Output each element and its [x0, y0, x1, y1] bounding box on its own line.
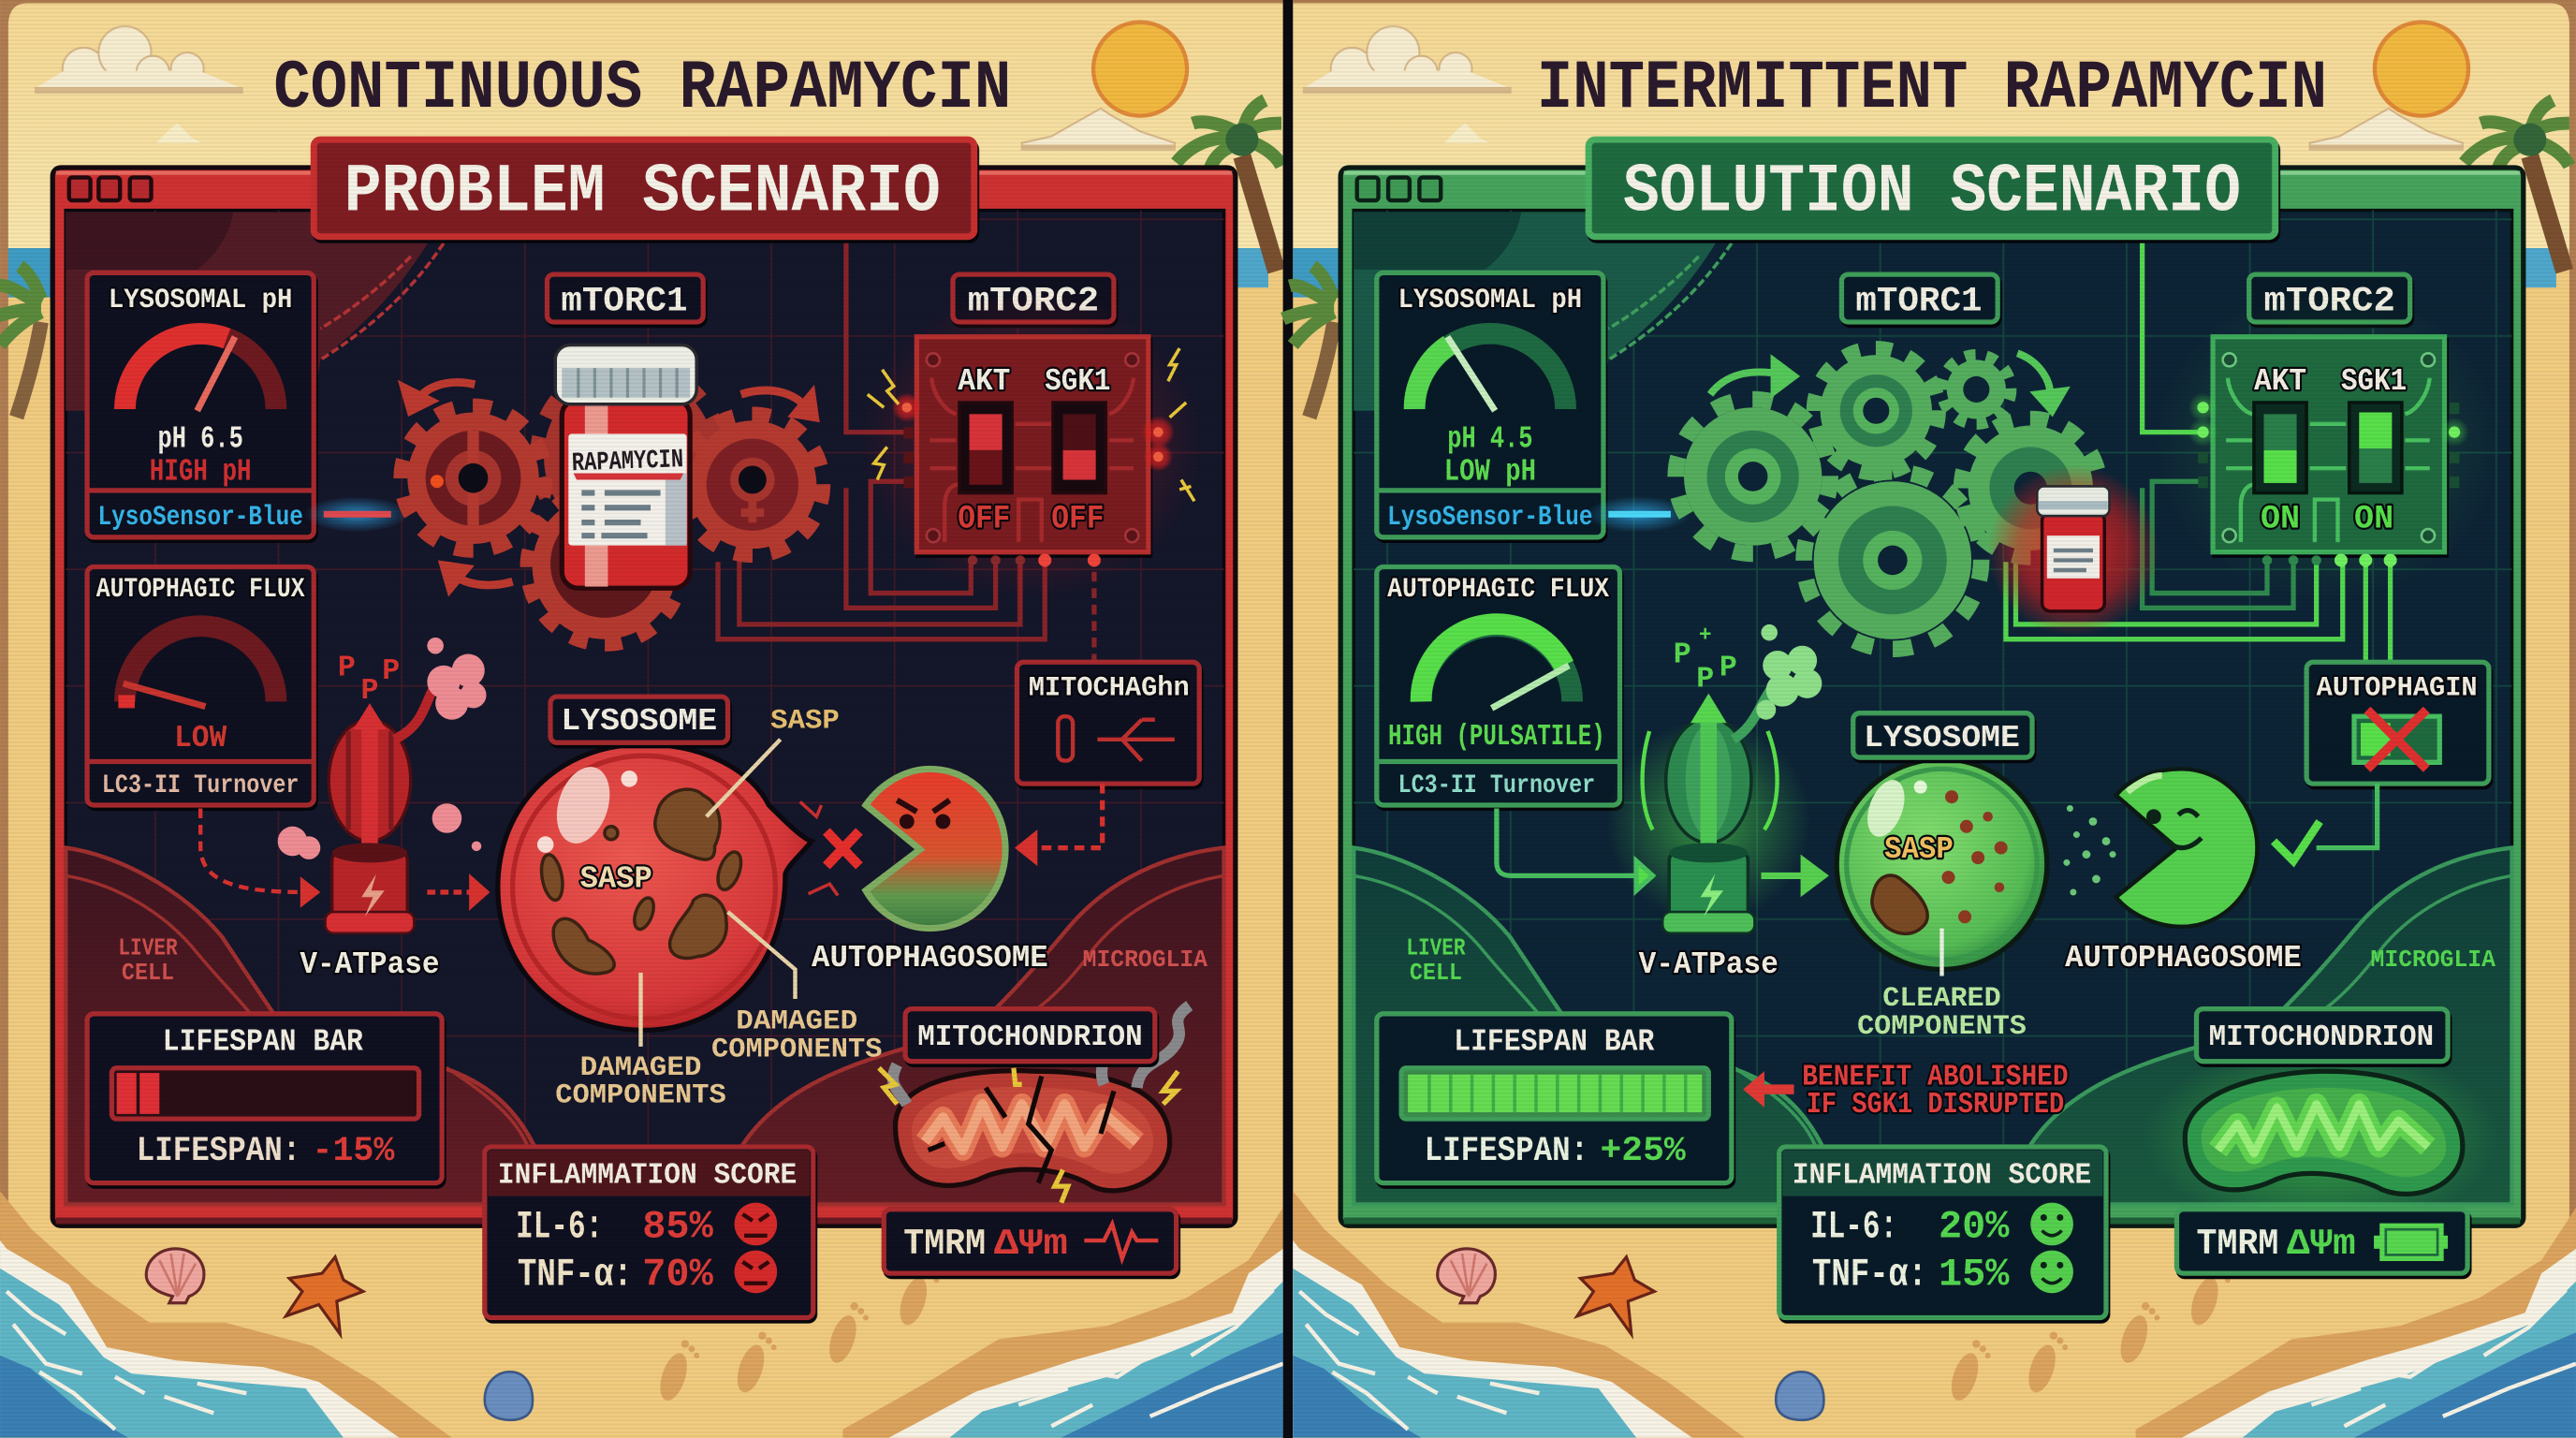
- box: mitochagin: [1017, 662, 1199, 784]
- footprints: [1946, 1265, 2231, 1404]
- icon: flatline pulse: [1084, 1224, 1158, 1258]
- shoreline left: [0, 1191, 452, 1438]
- label: liver cell: CELL: [122, 959, 174, 987]
- background: sea horizon right: [1236, 248, 1268, 287]
- panel: autophagic flux gauge: [87, 566, 314, 805]
- SGK1 toggle: [1053, 403, 1105, 493]
- switch panel: AKT and SGK1 off: [859, 287, 1204, 600]
- arrow: autophagin to autophagosome: [2274, 784, 2378, 861]
- icon: damaged mitochondrion: [879, 1005, 1190, 1203]
- mTORC1 gears: [401, 365, 823, 644]
- bottle label: RAPAMYCIN: [571, 446, 684, 478]
- panel: TMRM readout: TMRM: [2197, 1224, 2278, 1265]
- small cloud: [1022, 109, 1175, 150]
- switch panel: AKT and SGK1 on: ON: [2354, 500, 2393, 537]
- callout: SASP: SASP: [770, 704, 840, 736]
- small gear: [1942, 355, 2011, 424]
- panel: inflammation score: [485, 1147, 813, 1318]
- panel: inflammation score: [1779, 1147, 2106, 1318]
- panel: lysosomal pH gauge: pH 4.5: [1447, 421, 1532, 457]
- panel: inflammation score: 70%: [642, 1252, 713, 1297]
- SGK1 toggle: [2349, 403, 2402, 493]
- window buttons: [1357, 178, 1441, 200]
- switch panel: AKT and SGK1 on: SGK1: [2341, 364, 2407, 400]
- panel: intermittent rapamycin beach scene: [1283, 0, 2576, 1438]
- palm tree left: [0, 266, 41, 418]
- distant cloud: [156, 124, 202, 143]
- probe beam: [304, 496, 409, 533]
- icon: happy face: [2030, 1251, 2073, 1293]
- sand border strip: [1293, 0, 2576, 1249]
- panel: lysosomal pH gauge: LYSOSOMAL pH: [1398, 284, 1582, 315]
- panel: inflammation score: IL-6:: [1810, 1205, 1897, 1250]
- label: microglia: MICROGLIA: [2371, 946, 2496, 974]
- background: sky: [0, 0, 1283, 250]
- phosphate labels: +: [1699, 623, 1712, 647]
- background: sky: [1293, 0, 2576, 250]
- label: liver cell: LIVER: [118, 934, 178, 962]
- microglia region: [739, 848, 1224, 1204]
- probe beam: [1586, 496, 1690, 533]
- panel: lifespan bar: LIFESPAN:: [137, 1132, 300, 1171]
- window buttons: [69, 178, 152, 200]
- sand border strip: [0, 0, 1283, 1249]
- panel: TMRM readout: [884, 1210, 1177, 1273]
- panel: inflammation score: INFLAMMATION SCORE: [498, 1160, 797, 1193]
- icon: V-ATPase pump: [1606, 677, 1810, 933]
- lysosome clean: [1837, 759, 2047, 969]
- phosphate labels: P: [1696, 664, 1714, 697]
- panel: lysosomal pH gauge: LYSOSOMAL pH: [109, 284, 292, 315]
- sparks: [879, 1068, 1178, 1203]
- divider: [1283, 0, 1293, 1438]
- phosphate labels: P: [382, 655, 400, 688]
- panel: autophagic flux gauge: HIGH (PULSATILE): [1388, 721, 1605, 754]
- box: autophagin: [2306, 662, 2489, 784]
- label: mTORC2: mTORC2: [968, 283, 1099, 322]
- panel: TMRM readout: [2176, 1210, 2467, 1273]
- callout: damaged components right: COMPONENTS: [711, 1033, 883, 1064]
- sun: [1093, 22, 1187, 116]
- left gear: [401, 405, 546, 550]
- liver cell region: [1354, 848, 1843, 1204]
- gauge: [118, 626, 276, 707]
- cloud: [35, 26, 243, 94]
- bar: [1401, 1068, 1708, 1119]
- panel: lysosomal pH gauge: LysoSensor-Blue: [1387, 501, 1593, 533]
- rapamycin bottle small glowing: [1988, 465, 2159, 636]
- switch panel: AKT and SGK1 on: [2156, 287, 2500, 600]
- panel: lysosomal pH gauge: HIGH pH: [150, 454, 252, 490]
- smoke: [893, 1005, 1190, 1104]
- panel: lifespan bar: -15%: [313, 1132, 395, 1171]
- icon: pink smoke: [278, 638, 487, 859]
- switch panel: AKT and SGK1 off: OFF: [1051, 500, 1104, 537]
- label: microglia: MICROGLIA: [1083, 946, 1208, 974]
- wires mTORC2: [718, 240, 1094, 662]
- label: liver cell: [118, 934, 178, 987]
- box: autophagin: AUTOPHAGIN: [2317, 671, 2478, 703]
- label: mTORC1: mTORC1: [1855, 283, 1982, 322]
- background: lower sand: [0, 250, 1283, 1438]
- callout: damaged components right: DAMAGED: [736, 1005, 857, 1037]
- rotation arrows: [1710, 353, 2063, 411]
- panel: autophagic flux gauge: LC3-II Turnover: [1398, 771, 1595, 800]
- background: sea horizon right: [2524, 248, 2556, 287]
- palm tree right: [2465, 100, 2569, 271]
- panel: inflammation score: TNF-α:: [518, 1252, 633, 1297]
- shell: [1438, 1249, 1495, 1303]
- panel: autophagic flux gauge: AUTOPHAGIC FLUX: [96, 573, 305, 605]
- callout: benefit abolished: BENEFIT ABOLISHED: [1802, 1061, 2069, 1093]
- bottom gear: [1804, 472, 1982, 649]
- phosphate labels: P: [1720, 652, 1737, 684]
- switch panel: AKT and SGK1 on: ON: [2261, 500, 2300, 537]
- lysosome: [498, 744, 812, 1030]
- panel: lifespan bar: [87, 1014, 442, 1183]
- heading: continuous rapamycin: CONTINUOUS RAPAMYCIN: [273, 51, 1011, 128]
- pebble: [1776, 1372, 1823, 1420]
- shoreline left: [1293, 1191, 1745, 1438]
- callout: damaged components: DAMAGED: [580, 1051, 701, 1083]
- icon: blocked X: [800, 801, 859, 895]
- label: mTORC1: [547, 274, 703, 322]
- bottom gear: [527, 490, 681, 644]
- icon: angry face: [735, 1203, 777, 1245]
- label: lysosome: [1853, 713, 2032, 757]
- icon: full battery: [2374, 1225, 2448, 1258]
- microglia region: [2027, 848, 2511, 1204]
- rapamycin bottle: [555, 345, 696, 588]
- panel: inflammation score: TNF-α:: [1812, 1252, 1927, 1297]
- panel: inflammation score: INFLAMMATION SCORE: [1793, 1160, 2091, 1193]
- phosphate labels: P: [1674, 638, 1691, 671]
- starfish: [285, 1257, 363, 1334]
- panel: lysosomal pH gauge: LOW pH: [1444, 454, 1536, 490]
- icon: check mark: [2274, 822, 2320, 861]
- wires mTORC2: [2006, 240, 2391, 662]
- right gear: [681, 414, 823, 555]
- gear: [1814, 348, 1939, 473]
- icon: happy face: [2030, 1203, 2073, 1245]
- panel: continuous rapamycin beach scene: [0, 0, 1283, 1438]
- banner: problem scenario: [314, 139, 974, 237]
- window interior: [1354, 211, 2511, 1204]
- gear partly behind bottle: [1962, 419, 2100, 557]
- label: mTORC1: mTORC1: [561, 283, 688, 322]
- shoreline right: [842, 1208, 1283, 1438]
- callout: SASP: [707, 704, 840, 816]
- callout: damaged components: [555, 973, 726, 1111]
- starfish: [1577, 1257, 1654, 1334]
- panel: solution scenario window: [1340, 139, 2524, 1318]
- switch panel: AKT and SGK1 off: AKT: [958, 364, 1010, 400]
- box: mitochagin: MITOCHAGhn: [1029, 671, 1190, 703]
- label: mitochondrion: [2197, 1009, 2448, 1062]
- banner text: PROBLEM SCENARIO: [344, 154, 941, 232]
- distant cloud: [1444, 124, 1490, 143]
- phosphate labels: [1674, 623, 1737, 697]
- autophagosome angry: [866, 769, 1005, 929]
- panel: lysosomal pH gauge: LysoSensor-Blue: [97, 501, 303, 533]
- gear behind bottle: [537, 365, 722, 549]
- label: mTORC1: [1841, 274, 1998, 322]
- liver cell region: [66, 848, 555, 1204]
- gauge: [1414, 333, 1566, 411]
- panel: inflammation score: 20%: [1939, 1205, 2010, 1250]
- arrow: V-ATPase to lysosome: [1761, 861, 1823, 890]
- background: lower sand: [1293, 250, 2576, 1438]
- icon: green mist: [1756, 624, 1822, 720]
- label: mTORC2: [953, 274, 1114, 322]
- panel: inflammation score: 15%: [1939, 1252, 2010, 1297]
- shoreline right: [2136, 1208, 2576, 1438]
- panel: autophagic flux gauge: LC3-II Turnover: [102, 771, 299, 800]
- damaged component chunks: [538, 789, 745, 974]
- switch panel: AKT and SGK1 on: AKT: [2254, 364, 2306, 400]
- panel: lifespan bar: LIFESPAN BAR: [163, 1024, 363, 1060]
- panel: lifespan bar: [1377, 1014, 1732, 1183]
- label: mTORC2: [2249, 274, 2410, 322]
- label: lysosome: LYSOSOME: [1864, 721, 2020, 756]
- icon: crossed battery: [2354, 710, 2439, 769]
- panel: autophagic flux gauge: AUTOPHAGIC FLUX: [1387, 573, 1609, 605]
- panel: lifespan bar: LIFESPAN:: [1425, 1132, 1588, 1171]
- panel: inflammation score: IL-6:: [516, 1205, 603, 1250]
- gauge: [1421, 624, 1573, 708]
- label: mTORC2: mTORC2: [2263, 283, 2395, 322]
- label: autophagosome: AUTOPHAGOSOME: [2065, 941, 2302, 976]
- pebble: [485, 1372, 533, 1420]
- phosphate labels: P: [360, 675, 378, 708]
- background: sea horizon left: [1293, 248, 1342, 298]
- shell: [146, 1249, 204, 1303]
- label: liver cell: [1406, 934, 1466, 987]
- panel: lifespan bar: +25%: [1600, 1132, 1687, 1171]
- label: mitochondrion: [905, 1009, 1155, 1062]
- switch panel: AKT and SGK1 off: SGK1: [1045, 364, 1110, 400]
- lysosome: SASP: [580, 862, 652, 898]
- gauge: [124, 333, 276, 411]
- callout: benefit abolished: [1743, 1061, 2069, 1122]
- window interior: [66, 211, 1224, 1204]
- bar: [111, 1068, 419, 1119]
- label: mitochondrion: MITOCHONDRION: [917, 1021, 1143, 1054]
- panel: autophagic flux gauge: [1377, 566, 1620, 805]
- arrow: flux to V-ATPase: [200, 808, 317, 903]
- receptor icon: [1058, 716, 1175, 761]
- AKT toggle: [959, 403, 1012, 493]
- icon: healthy mitochondrion: [2144, 1042, 2498, 1232]
- panel: lysosomal pH gauge: [1377, 272, 1603, 537]
- footprints: [655, 1265, 939, 1404]
- label: autophagosome: AUTOPHAGOSOME: [812, 941, 1048, 976]
- lysosome clean: SASP: [1884, 832, 1954, 868]
- panel: TMRM readout: ΔΨm: [2287, 1224, 2356, 1265]
- small cloud: [2310, 109, 2463, 150]
- label: liver cell: LIVER: [1406, 934, 1466, 962]
- icon: V-ATPase pump: [326, 677, 444, 933]
- AKT toggle: [2254, 403, 2306, 493]
- label: lysosome: LYSOSOME: [561, 704, 717, 740]
- rotation arrows: [404, 382, 815, 588]
- autophagosome happy: [2116, 769, 2257, 927]
- connectors and sparks: [868, 348, 1194, 566]
- particles: [2063, 805, 2116, 895]
- palm tree right: [1177, 100, 1281, 271]
- switch panel: AKT and SGK1 off: OFF: [958, 500, 1010, 537]
- panel: TMRM readout: TMRM: [903, 1224, 986, 1265]
- left gear: [1676, 399, 1830, 553]
- callout: cleared components: COMPONENTS: [1857, 1010, 2027, 1042]
- label: V-ATPase: V-ATPase: [1639, 947, 1778, 983]
- phosphate labels: [338, 652, 400, 708]
- banner text: SOLUTION SCENARIO: [1623, 154, 2241, 232]
- icon: angry face: [735, 1251, 777, 1293]
- arrow: V-ATPase to lysosome: [427, 879, 487, 905]
- callout: cleared components: CLEARED: [1882, 982, 2001, 1014]
- panel: problem scenario window: [52, 139, 1236, 1318]
- label: liver cell: CELL: [1410, 959, 1462, 987]
- panel: autophagic flux gauge: LOW: [174, 721, 227, 756]
- panel: lysosomal pH gauge: [87, 272, 314, 537]
- background: sea horizon left: [7, 248, 56, 298]
- mTORC1 gears active: [1676, 348, 2100, 649]
- arrow: mitochagin to autophagosome: [1018, 784, 1103, 861]
- panel: lifespan bar: LIFESPAN BAR: [1454, 1024, 1654, 1060]
- panel: inflammation score: 85%: [642, 1205, 713, 1250]
- phosphate labels: P: [338, 652, 356, 684]
- window frame: [52, 168, 1236, 1225]
- heading: intermittent rapamycin: INTERMITTENT RAPAMYCIN: [1537, 51, 2327, 128]
- banner: solution scenario: [1588, 139, 2276, 237]
- label: lysosome: [550, 697, 728, 742]
- callout: damaged components right: [711, 912, 883, 1064]
- sun: [2375, 22, 2468, 116]
- arrow: flux to V-ATPase: [1497, 808, 1653, 890]
- callout: cleared components: [1857, 929, 2027, 1042]
- cloud: [1303, 26, 1512, 94]
- panel: lysosomal pH gauge: pH 6.5: [158, 421, 243, 457]
- panel: TMRM readout: ΔΨm: [994, 1224, 1068, 1265]
- connectors: [2188, 392, 2469, 566]
- palm tree left: [1283, 266, 1334, 418]
- label: mitochondrion: MITOCHONDRION: [2209, 1021, 2434, 1054]
- callout: benefit abolished: IF SGK1 DISRUPTED: [1807, 1089, 2064, 1122]
- window frame: [1340, 168, 2524, 1225]
- label: V-ATPase: V-ATPase: [300, 947, 440, 983]
- callout: damaged components: COMPONENTS: [555, 1079, 726, 1111]
